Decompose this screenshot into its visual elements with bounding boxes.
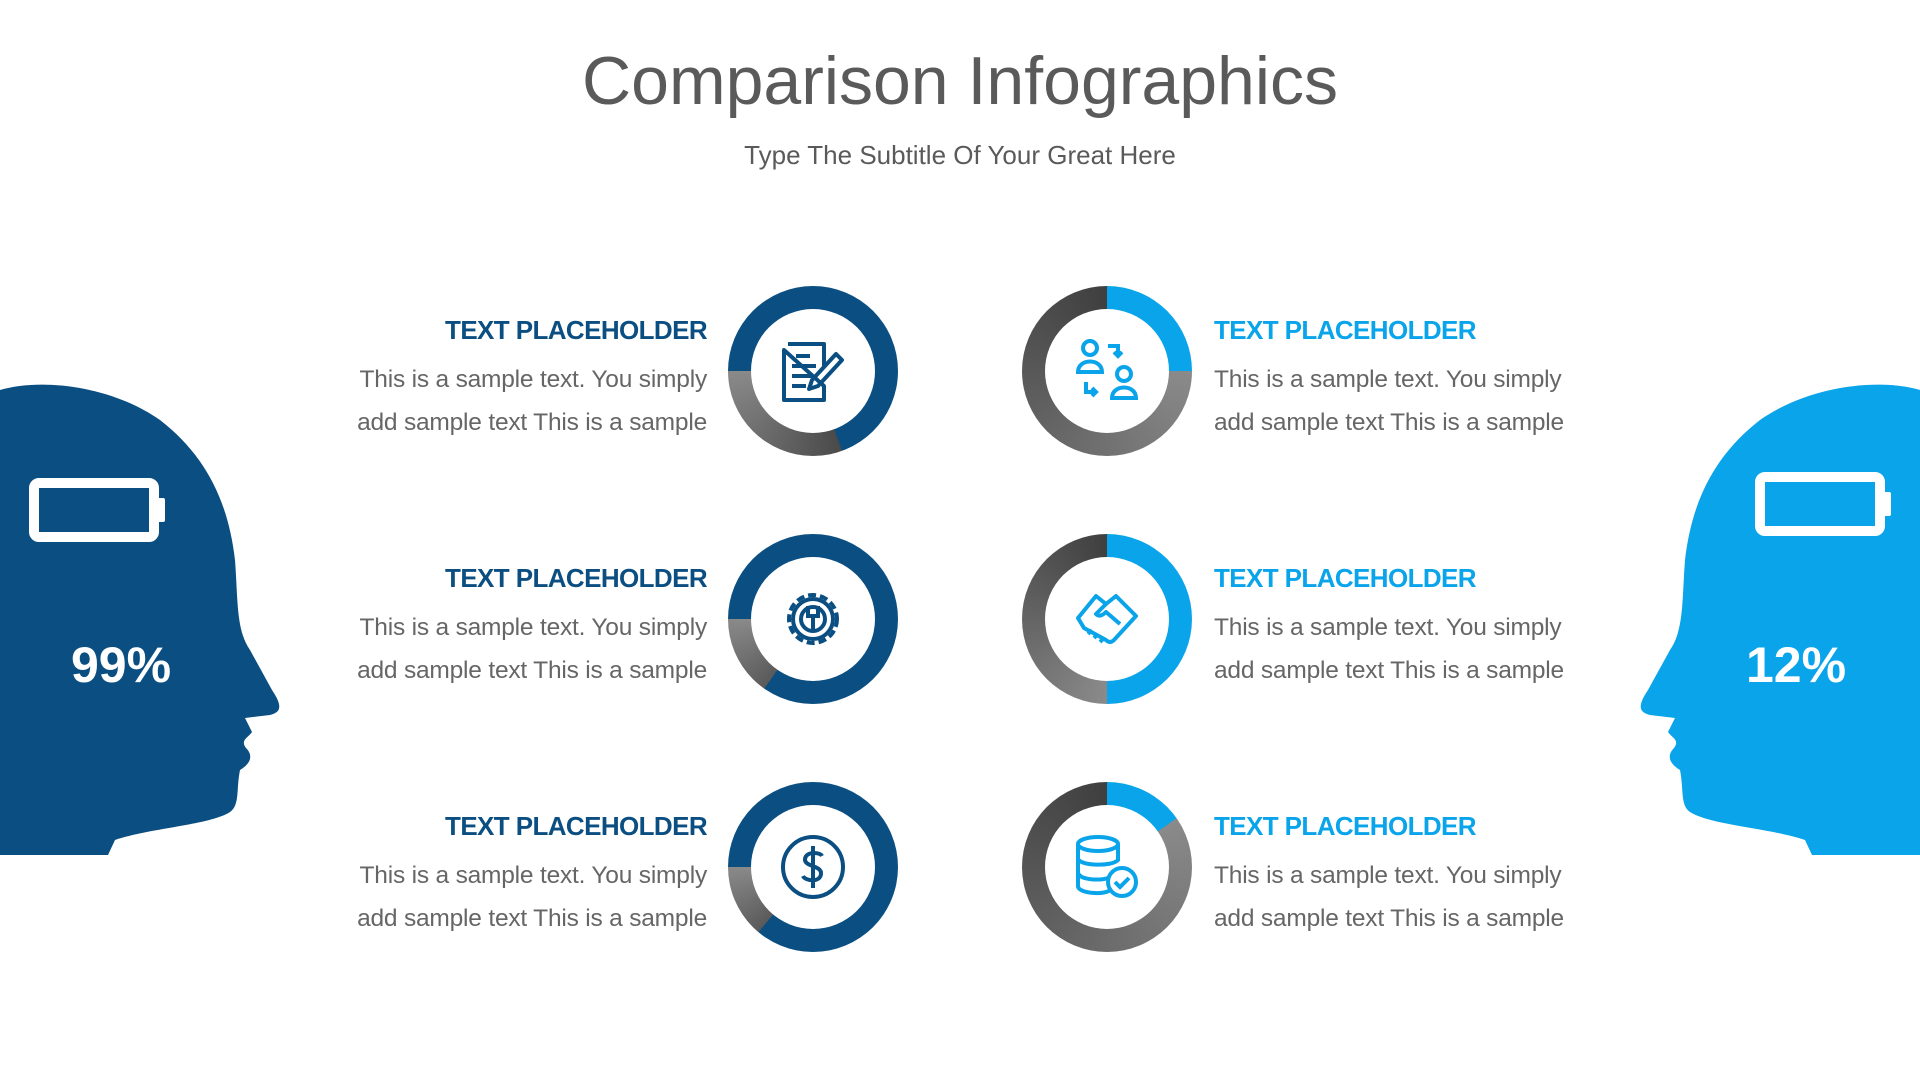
right head (1640, 384, 1920, 855)
item R2 ring (1022, 534, 1192, 704)
item R1 text: TEXT PLACEHOLDER (1214, 315, 1476, 345)
item L2 text: add sample text This is a sample (357, 657, 707, 684)
subtitle: Type The Subtitle Of Your Great Here (744, 140, 1176, 170)
item R2 text (1214, 563, 1564, 684)
icon: battery left (29, 478, 165, 542)
item R1 ring (1022, 286, 1192, 456)
item R3 ring (1022, 782, 1192, 952)
item L2 text: This is a sample text. You simply (360, 614, 707, 641)
item R3 text: This is a sample text. You simply (1214, 862, 1561, 889)
item L1 text: This is a sample text. You simply (360, 366, 707, 393)
item R2 text: This is a sample text. You simply (1214, 614, 1561, 641)
icon: gear wrench (787, 593, 839, 645)
item L2 text: TEXT PLACEHOLDER (445, 563, 707, 593)
item L1 ring (728, 286, 898, 456)
item R1 text: This is a sample text. You simply (1214, 366, 1561, 393)
item R2 text: add sample text This is a sample (1214, 657, 1564, 684)
percent left: 99% (71, 637, 171, 693)
item L3 text: This is a sample text. You simply (360, 862, 707, 889)
item R1 text (1214, 315, 1564, 436)
item L3 text: add sample text This is a sample (357, 905, 707, 932)
item L2 ring (728, 534, 898, 704)
icon: dollar (781, 835, 845, 899)
item L3 ring (728, 782, 898, 952)
icon: people exchange (1076, 339, 1138, 400)
item L1 text: add sample text This is a sample (357, 409, 707, 436)
icon: battery right (1755, 472, 1891, 536)
item L3 text: TEXT PLACEHOLDER (445, 811, 707, 841)
percent right: 12% (1746, 637, 1846, 693)
icon: handshake (1076, 594, 1138, 644)
item L1 text: TEXT PLACEHOLDER (445, 315, 707, 345)
left head (0, 384, 280, 855)
item R2 text: TEXT PLACEHOLDER (1214, 563, 1476, 593)
item L3 text (357, 811, 708, 932)
item R3 text (1214, 811, 1564, 932)
item R3 text: TEXT PLACEHOLDER (1214, 811, 1476, 841)
icon: database check (1076, 835, 1138, 898)
title: Comparison Infographics (582, 43, 1338, 119)
item L2 text (357, 563, 708, 684)
item L1 text (357, 315, 708, 436)
item R3 text: add sample text This is a sample (1214, 905, 1564, 932)
icon: document pen (782, 342, 844, 402)
item R1 text: add sample text This is a sample (1214, 409, 1564, 436)
